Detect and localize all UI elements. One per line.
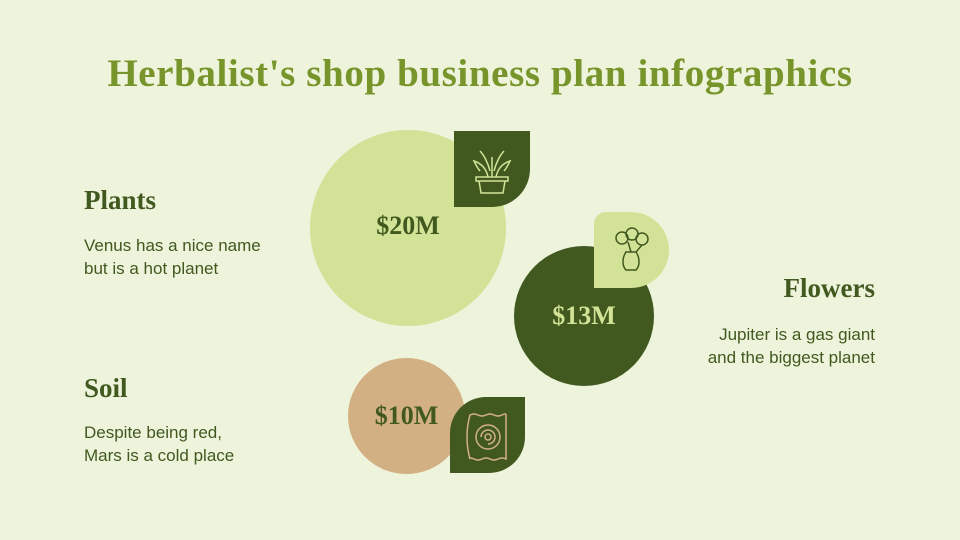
soil text: Despite being red,: [84, 423, 222, 442]
soil text: Mars is a cold place: [84, 446, 234, 465]
flowers heading: Flowers: [784, 273, 875, 303]
circle: plants $20M: [310, 130, 506, 326]
flowers text: and the biggest planet: [708, 348, 875, 367]
plants heading: Plants: [84, 185, 156, 215]
circle: soil $10M: $10M: [375, 401, 438, 430]
flowers text: [708, 325, 875, 367]
plants text: Venus has a nice name: [84, 236, 261, 255]
circle: flowers $13M: [514, 246, 654, 386]
soil text: [84, 423, 234, 465]
plants text: [84, 236, 261, 278]
icon: plant pot: [454, 131, 530, 207]
plants text: but is a hot planet: [84, 259, 218, 278]
circle: soil $10M: [348, 358, 465, 474]
circle: plants $20M: $20M: [376, 211, 440, 240]
icon: flower vase: [594, 212, 669, 288]
title: Herbalist's shop business plan infographics: [107, 52, 853, 95]
icon: soil bag: [450, 397, 525, 473]
soil heading: Soil: [84, 373, 128, 403]
circle: flowers $13M: $13M: [552, 301, 616, 330]
flowers text: Jupiter is a gas giant: [719, 325, 875, 344]
